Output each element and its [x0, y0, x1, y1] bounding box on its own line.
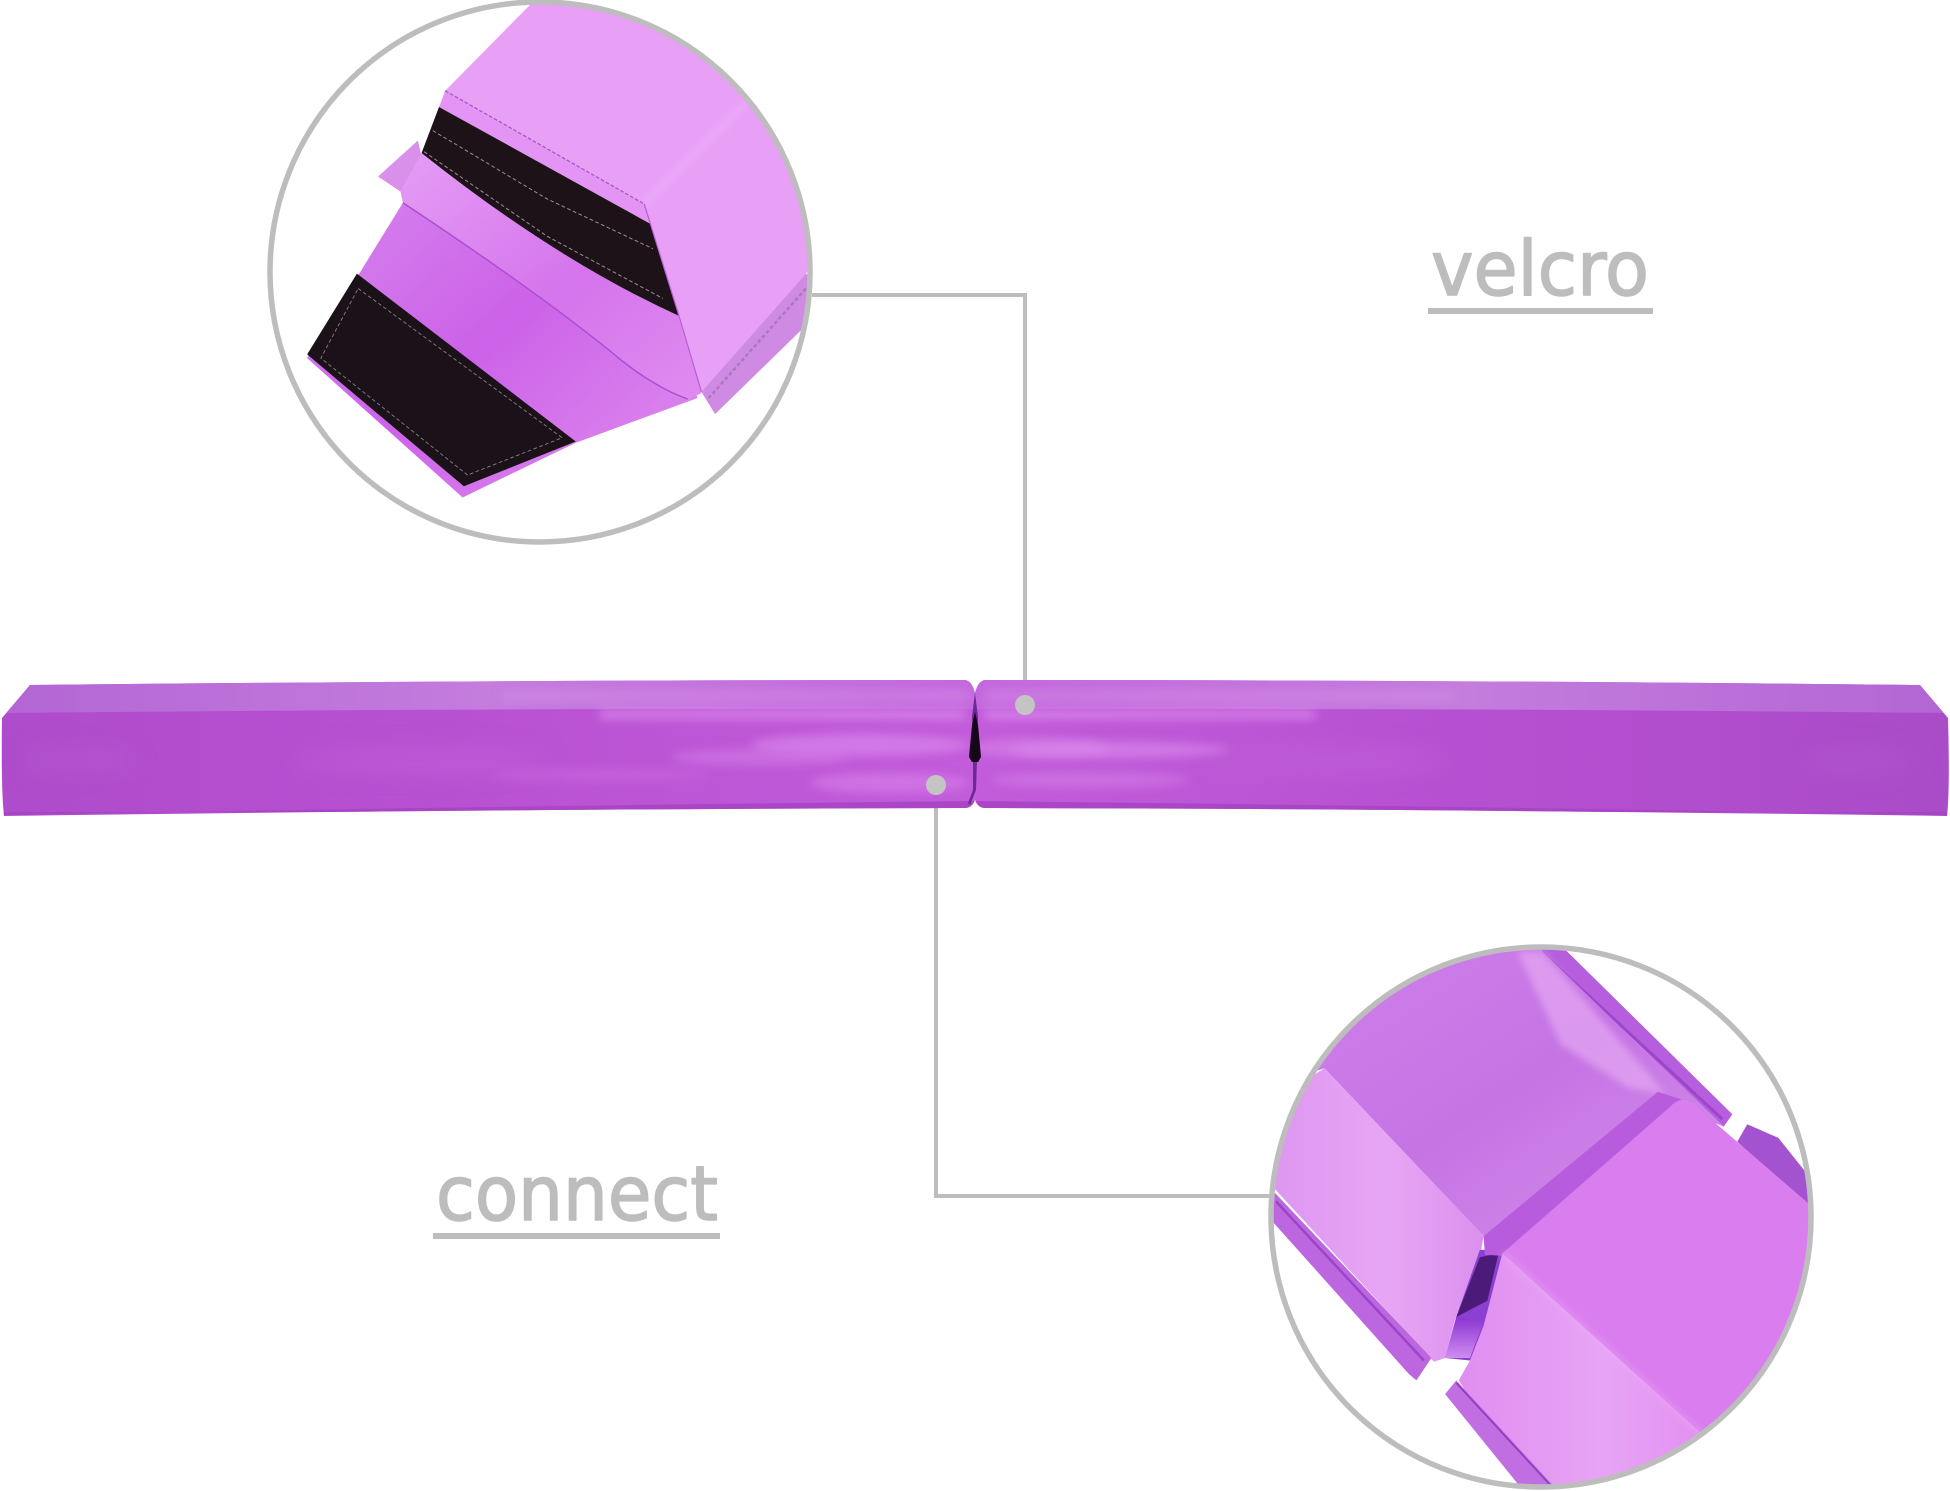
inner gap lower	[1445, 1317, 1484, 1358]
rear block light streak	[1517, 951, 1666, 1094]
lower velcro strip	[307, 274, 576, 486]
balance beam	[0, 675, 1950, 820]
lower flap	[307, 153, 698, 497]
callout dot: connect	[926, 775, 946, 795]
upper velcro strip	[422, 107, 679, 316]
seam strip	[1484, 1092, 1681, 1256]
callout line: velcro connector	[812, 295, 1025, 705]
velcro circle ring	[270, 2, 810, 542]
beam joint seam	[968, 693, 978, 805]
detail circle: connect close-up	[1268, 944, 1814, 1490]
lower left hem	[1272, 1193, 1431, 1380]
rear block side face	[1275, 1068, 1484, 1362]
detail circle: velcro close-up	[270, 0, 827, 542]
beam left segment	[0, 675, 975, 820]
face edge	[644, 204, 701, 392]
front block top face	[1502, 1100, 1808, 1432]
callout dot: velcro	[1015, 695, 1035, 715]
right hem piece	[1737, 1124, 1808, 1203]
hem stitching	[709, 289, 806, 398]
velcro underline	[1428, 308, 1653, 314]
connect circle ring	[1271, 947, 1811, 1487]
lower hem stitch	[1456, 1382, 1550, 1484]
connect underline	[433, 1233, 720, 1239]
top seam stitching	[445, 91, 644, 204]
upper strip stitching	[424, 131, 663, 298]
middle band	[400, 153, 701, 400]
label: velcro: velcro	[1431, 224, 1649, 313]
lower strip stitching	[321, 289, 562, 475]
front block side face	[1459, 1254, 1701, 1491]
seam lip	[439, 91, 650, 224]
left flap	[378, 141, 423, 192]
right hem strip	[701, 274, 815, 414]
upper right hem	[1538, 948, 1732, 1127]
upper hem dark line	[1542, 953, 1722, 1119]
label: connect: connect	[436, 1149, 718, 1238]
gap underlay	[1445, 1250, 1505, 1360]
rear block top face	[1318, 950, 1724, 1236]
main light body	[445, 0, 827, 392]
front block crease	[1502, 1254, 1701, 1434]
inner gap dark	[1456, 1254, 1499, 1317]
beam joint gap	[969, 712, 981, 762]
fold line	[403, 203, 688, 399]
callout line: connect connector	[936, 785, 1272, 1196]
beam right segment	[970, 675, 1950, 820]
lower hem	[1445, 1380, 1552, 1484]
left hem dark line	[1276, 1201, 1424, 1360]
body ridge	[644, 103, 746, 204]
